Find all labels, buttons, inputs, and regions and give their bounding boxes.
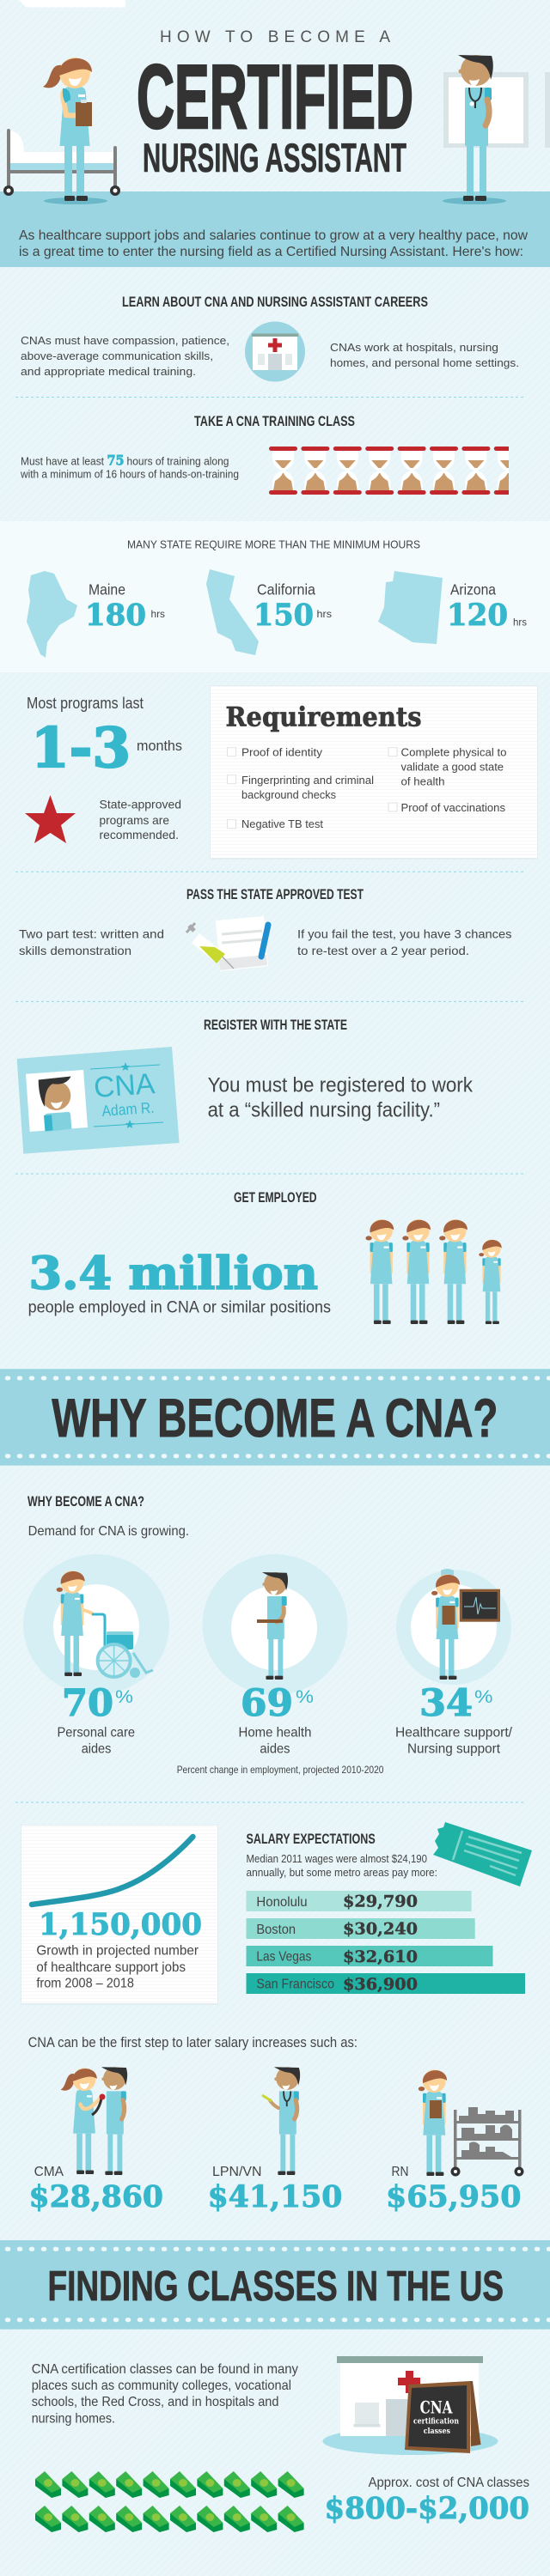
left text: skills demonstration	[19, 944, 131, 957]
section: demand	[23, 1493, 513, 1776]
checklist	[227, 746, 507, 830]
salary bars: Las Vegas	[256, 1949, 311, 1964]
training text: with a minimum of 16 hours of hands-on-training	[20, 469, 239, 481]
cost callout: $800-$2,000	[325, 2491, 529, 2526]
heading: REGISTER WITH THE STATE	[204, 1018, 347, 1033]
salary bars: $30,240	[343, 1921, 418, 1939]
Maine: 180	[85, 598, 146, 633]
left text	[21, 334, 229, 378]
kicker: HOW TO BECOME A	[160, 28, 390, 46]
panel: state minimum hours	[0, 521, 550, 672]
Maine: hrs	[151, 608, 165, 620]
salary bars: Boston	[256, 1923, 296, 1937]
caption	[36, 1944, 199, 1991]
checklist: Negative TB test	[241, 817, 323, 830]
stat: personal care aides: 70	[62, 1682, 113, 1725]
checklist: Proof of identity	[241, 746, 323, 759]
description: places such as community colleges, vocational	[32, 2379, 291, 2393]
footnote: Percent change in employment, projected 2010-2020	[177, 1764, 384, 1776]
right text: to re-test over a 2 year period.	[297, 944, 469, 957]
stat: healthcare support: %	[474, 1687, 493, 1707]
intro text: As healthcare support jobs and salaries continue to grow at a very healthy pace, now	[19, 228, 528, 243]
cost callout: Approx. cost of CNA classes	[369, 2476, 529, 2490]
stat: healthcare support: Healthcare support/	[395, 1726, 513, 1741]
career: RN: $65,950	[386, 2179, 521, 2215]
right text	[330, 341, 519, 369]
nurse with clipboard	[43, 58, 107, 204]
description: schools, the Red Cross, and in hospitals and	[32, 2395, 278, 2409]
career: LPN/VN	[208, 2067, 342, 2215]
heading: SALARY EXPECTATIONS	[246, 1831, 376, 1847]
caption: from 2008 – 2018	[36, 1977, 134, 1991]
hero section	[0, 0, 550, 267]
description: nursing homes.	[32, 2412, 115, 2427]
heading: Requirements	[225, 702, 421, 733]
checklist: of health	[400, 775, 445, 788]
step: learn about careers	[21, 294, 519, 381]
Arizona: 120	[447, 598, 508, 633]
caption: Growth in projected number	[36, 1944, 199, 1959]
registration text: at a “skilled nursing facility.”	[208, 1099, 440, 1122]
icon: building and sign: certification	[413, 2418, 459, 2427]
figure: 1,150,000	[39, 1907, 202, 1942]
California: California	[257, 581, 315, 598]
step: get employed	[28, 1190, 502, 1324]
icon: building and sign: CNA	[420, 2397, 453, 2418]
window	[443, 72, 550, 148]
left text	[19, 927, 164, 957]
training text	[20, 452, 239, 481]
description: Median 2011 wages were almost $24,190	[246, 1853, 427, 1865]
stat: home health aides: 69	[241, 1682, 293, 1725]
ground band	[0, 191, 550, 267]
program length: 1-3	[31, 716, 131, 781]
stat: healthcare support: 34	[419, 1682, 473, 1725]
heading: TAKE A CNA TRAINING CLASS	[194, 413, 355, 429]
ID card: Adam R.	[101, 1099, 155, 1120]
intro text: is a great time to enter the nursing field as a Certified Nursing Assistant. Here's how:	[19, 245, 523, 259]
checklist: background checks	[241, 788, 336, 801]
checklist: validate a good state	[400, 761, 504, 774]
program length: Most programs last	[27, 695, 144, 712]
title	[137, 28, 413, 180]
stat: healthcare support: Nursing support	[407, 1742, 501, 1757]
stat: home health aides: aides	[260, 1742, 290, 1757]
description	[32, 2362, 298, 2427]
left text: above-average communication skills,	[21, 349, 213, 362]
left text: CNAs must have compassion, patience,	[21, 334, 229, 347]
salary bars: $32,610	[343, 1948, 418, 1966]
icon row: hourglasses	[269, 447, 522, 495]
checklist: Complete physical to	[400, 746, 507, 759]
stat: healthcare support	[395, 1569, 513, 1757]
stat: home health aides: %	[296, 1687, 314, 1707]
salary bars: Honolulu	[256, 1895, 308, 1910]
stat: personal care aides: Personal care	[57, 1726, 135, 1741]
step: state test	[19, 887, 512, 971]
checklist: Fingerprinting and criminal	[241, 774, 374, 787]
Arizona	[378, 571, 527, 644]
ID card: CNA	[93, 1067, 156, 1104]
state-approved callout: programs are	[100, 813, 169, 827]
California: hrs	[316, 608, 332, 620]
icon: star	[25, 795, 76, 843]
stat: personal care aides: %	[115, 1687, 133, 1707]
career: RN	[386, 2069, 524, 2215]
left text: Two part test: written and	[19, 927, 164, 941]
icon: building and sign	[323, 2356, 498, 2455]
intro: CNA can be the first step to later salary increases such as:	[28, 2034, 358, 2050]
stat: personal care aides	[23, 1554, 169, 1757]
career: LPN/VN: LPN/VN	[212, 2165, 261, 2179]
stat: home health aides	[203, 1554, 347, 1757]
registration text	[208, 1073, 474, 1122]
panel: requirements	[210, 685, 538, 860]
state-approved callout	[25, 795, 181, 843]
state-approved callout: State-approved	[100, 798, 181, 811]
top white strip	[19, 0, 125, 7]
icon: test paper and syringe	[186, 916, 268, 971]
section: salary steps	[28, 2034, 524, 2215]
caption: people employed in CNA or similar positions	[28, 1299, 331, 1317]
description	[246, 1853, 437, 1879]
right text: If you fail the test, you have 3 chances	[297, 927, 512, 941]
Arizona: Arizona	[450, 581, 496, 598]
icon grid: money stacks	[35, 2471, 304, 2532]
description: CNA certification classes can be found in many	[32, 2362, 298, 2377]
right text: CNAs work at hospitals, nursing	[330, 341, 498, 354]
doctor with stethoscope	[443, 55, 506, 204]
salary bars: San Francisco	[256, 1978, 334, 1992]
checklist: Proof of vaccinations	[400, 801, 505, 814]
Maine	[27, 571, 165, 658]
career: CMA: $28,860	[29, 2179, 163, 2215]
career: LPN/VN: $41,150	[208, 2179, 342, 2215]
career: RN: RN	[392, 2165, 409, 2179]
state-approved callout: recommended.	[100, 828, 179, 841]
description: annually, but some metro areas pay more:	[246, 1867, 437, 1879]
Maine: Maine	[89, 581, 125, 598]
icon: ticket	[433, 1822, 532, 1886]
icon: building and sign: classes	[424, 2427, 450, 2436]
ID card	[17, 1047, 180, 1154]
registration text: You must be registered to work	[208, 1073, 474, 1097]
California: 150	[254, 598, 314, 633]
salary bars: $29,790	[343, 1893, 418, 1911]
right text: homes, and personal home settings.	[330, 356, 519, 369]
section: where to find classes	[32, 2356, 529, 2532]
panel: salary expectations	[246, 1822, 532, 1994]
stat: home health aides: Home health	[239, 1726, 311, 1741]
heading: GET EMPLOYED	[234, 1190, 317, 1206]
right text	[297, 927, 512, 957]
Arizona: hrs	[513, 617, 527, 629]
intro text	[19, 228, 528, 259]
training text: hours of training along	[127, 455, 229, 467]
icon: hospital	[245, 321, 305, 381]
cost callout	[325, 2476, 529, 2526]
heading: LEARN ABOUT CNA AND NURSING ASSISTANT CAREERS	[122, 294, 428, 310]
salary bars	[246, 1891, 525, 1994]
panel: job growth	[21, 1825, 218, 2005]
program length	[27, 695, 182, 781]
banner: why become a CNA	[0, 1369, 550, 1466]
heading: MANY STATE REQUIRE MORE THAN THE MINIMUM HOURS	[127, 538, 420, 551]
left text: and appropriate medical training.	[21, 365, 196, 378]
training text: Must have at least	[21, 455, 104, 467]
subheading: WHY BECOME A CNA?	[28, 1493, 144, 1510]
stat: personal care aides: aides	[82, 1742, 111, 1757]
program length: months	[137, 738, 182, 754]
demand text: Demand for CNA is growing.	[28, 1524, 189, 1539]
big number: 3.4 million	[29, 1248, 318, 1300]
career: CMA	[29, 2067, 163, 2215]
salary bars: $36,900	[343, 1976, 418, 1994]
line chart	[32, 1837, 192, 1905]
heading: PASS THE STATE APPROVED TEST	[186, 887, 364, 902]
California	[206, 569, 332, 655]
training text: 75	[107, 452, 124, 469]
step: training class	[20, 413, 522, 495]
step: register	[17, 1018, 474, 1154]
career: CMA: CMA	[34, 2165, 64, 2179]
banner: finding classes	[0, 2240, 550, 2330]
hospital bed	[3, 129, 120, 196]
caption: of healthcare support jobs	[36, 1960, 186, 1975]
icon row: nurses	[365, 1219, 502, 1324]
